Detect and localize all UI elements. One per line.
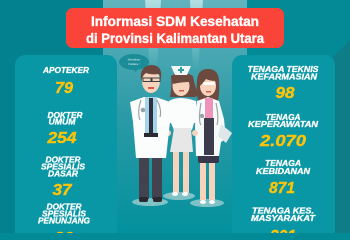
stat: dokter spesialis dasar: 37 — [52, 182, 73, 199]
stat: tenaga kes. masyarakat — [251, 206, 316, 240]
stat: dokter spesialis dasar: DOKTER — [46, 156, 81, 164]
panel: right statistics — [232, 55, 335, 240]
title banner: Informasi SDM Kesehatan — [91, 13, 259, 29]
figure: nurse — [163, 66, 199, 200]
speech bubble — [119, 54, 149, 72]
stat: tenaga kebidanan: KEBIDANAN — [256, 167, 310, 176]
stat: tenaga teknis kefarmasian: KEFARMASIAN — [251, 72, 317, 82]
stat: tenaga kebidanan — [256, 159, 310, 197]
stat: dokter umum — [46, 111, 83, 147]
stat: dokter spesialis dasar: DASAR — [48, 170, 78, 178]
stat: dokter umum: UMUM — [48, 118, 76, 126]
stat: dokter spesialis dasar: SPESIALIS — [41, 162, 86, 172]
stat: dokter spesialis penunjang: DOKTER — [46, 202, 82, 212]
stat: tenaga keperawatan: 2.070 — [259, 133, 306, 150]
stat: dokter umum: 254 — [46, 130, 77, 147]
figure: female doctor — [190, 69, 232, 207]
stat: tenaga keperawatan — [248, 113, 318, 150]
stat: apoteker: APOTEKER — [42, 66, 89, 75]
title banner — [66, 8, 284, 48]
stat: tenaga kes. masyarakat: TENAGA KES. — [252, 206, 314, 216]
stat: dokter spesialis penunjang: SPESIALIS — [42, 210, 87, 218]
stat: tenaga teknis kefarmasian: TENAGA TEKNIS — [248, 65, 319, 74]
stat: tenaga keperawatan: KEPERAWATAN — [248, 120, 318, 129]
figure: male doctor — [130, 65, 170, 206]
stat: apoteker — [42, 66, 89, 97]
stat: apoteker: 79 — [55, 80, 73, 97]
stat: tenaga keperawatan: TENAGA — [266, 113, 301, 122]
stat: dokter umum: DOKTER — [48, 111, 83, 120]
stat: dokter spesialis penunjang: PENUNJANG — [38, 216, 90, 226]
stat: dokter spesialis dasar — [41, 156, 86, 199]
speech bubble: Sehatkan — [128, 58, 141, 62]
stat: tenaga kebidanan: TENAGA — [265, 159, 301, 168]
stat: tenaga kes. masyarakat: MASYARAKAT — [251, 214, 316, 223]
stat: dokter spesialis penunjang — [38, 202, 90, 240]
stat: tenaga teknis kefarmasian: 98 — [276, 85, 295, 102]
speech bubble: Kaltara ! — [128, 62, 140, 66]
stat: tenaga teknis kefarmasian — [248, 65, 319, 102]
panel: left statistics — [15, 55, 117, 240]
title banner: di Provinsi Kalimantan Utara — [86, 30, 264, 46]
stat: tenaga kebidanan: 871 — [269, 180, 295, 197]
